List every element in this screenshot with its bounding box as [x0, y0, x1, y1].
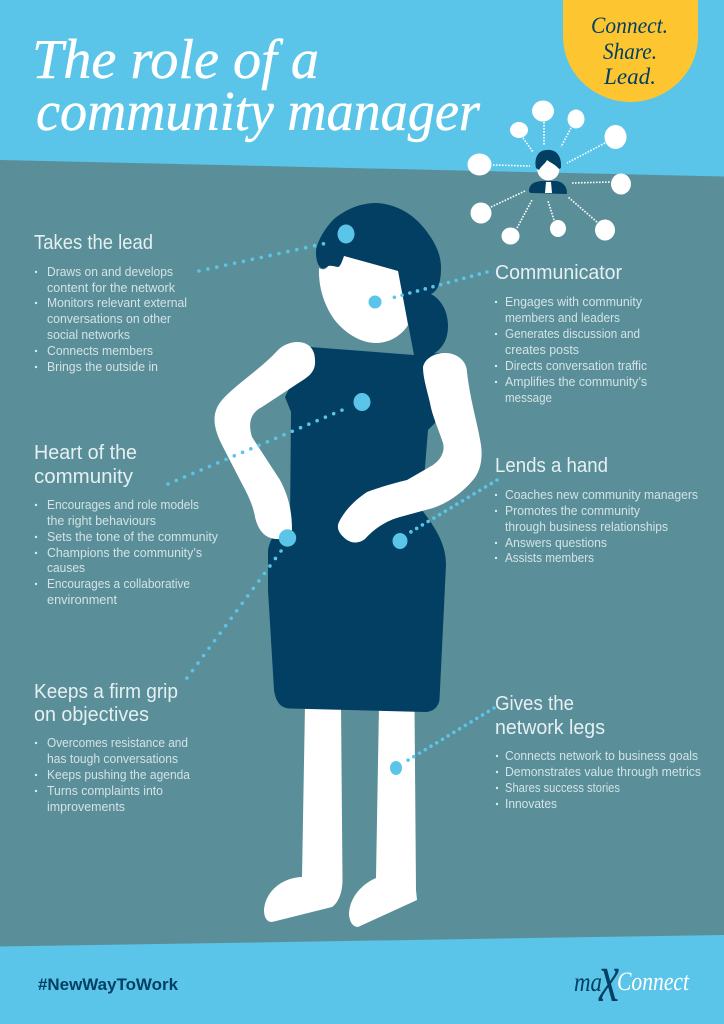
text block: Communicator: creates posts	[505, 343, 579, 357]
text block: Heart of the community: the right behaviours	[47, 514, 156, 528]
text block: Keeps a firm grip on objectives: Overcomes resistance and	[47, 736, 188, 750]
text block: Lends a hand	[495, 455, 698, 565]
text block: Communicator: Communicator	[495, 262, 622, 284]
main teal panel	[0, 160, 724, 946]
text block: Gives the network legs: Innovates	[505, 797, 557, 811]
text block: Gives the network legs: Demonstrates value through metrics	[505, 765, 701, 779]
text block: Keeps a firm grip on objectives: improvements	[47, 800, 125, 814]
text block: Keeps a firm grip on objectives: has tough conversations	[47, 752, 178, 766]
text block: Heart of the community: environment	[47, 593, 118, 607]
text block: Lends a hand: Lends a hand	[495, 455, 608, 477]
text block: Takes the lead: conversations on other	[47, 312, 171, 326]
text block: Communicator: members and leaders	[505, 311, 620, 325]
text block: Heart of the community: community	[34, 466, 133, 488]
text block: Gives the network legs: network legs	[495, 717, 605, 739]
text block: Lends a hand: Promotes the community	[505, 504, 641, 518]
badge: Connect. Share. Lead.	[563, 0, 698, 102]
badge: Connect. Share. Lead.: Share.	[603, 39, 657, 64]
text block: Lends a hand: Coaches new community managers	[505, 488, 698, 502]
text block: Communicator	[495, 262, 647, 405]
text block: Keeps a firm grip on objectives: Keeps pushing the agenda	[47, 768, 190, 782]
text block: Communicator: Generates discussion and	[505, 327, 640, 341]
badge: Connect. Share. Lead.: Connect.	[591, 13, 668, 38]
text block: Takes the lead	[34, 232, 187, 374]
text block: Communicator: Engages with community	[505, 295, 643, 309]
text block: Gives the network legs	[495, 693, 701, 811]
text block: Communicator: message	[505, 391, 552, 405]
logo: maxConnect	[574, 940, 690, 1017]
text block: Gives the network legs: Gives the	[495, 693, 574, 715]
text block: Lends a hand: Answers questions	[505, 536, 607, 550]
text block: Keeps a firm grip on objectives	[34, 681, 190, 814]
text block: Takes the lead: content for the network	[47, 281, 176, 295]
title: community manager	[36, 81, 480, 143]
badge: Connect. Share. Lead.: Lead.	[603, 64, 656, 89]
text block: Keeps a firm grip on objectives: on objectives	[34, 704, 149, 726]
hashtag: #NewWayToWork	[38, 975, 179, 994]
text block: Heart of the community: Encourages a collaborative	[47, 577, 190, 591]
text block: Keeps a firm grip on objectives: Keeps a firm grip	[34, 681, 178, 703]
text block: Communicator: Directs conversation traffic	[505, 359, 647, 373]
text block: Heart of the community: Champions the community’s	[47, 546, 202, 560]
icon: network of people around a manager	[468, 100, 631, 244]
text block: Heart of the community: Encourages and role models	[47, 498, 199, 512]
title: The role of a	[32, 29, 319, 91]
text block: Heart of the community: causes	[47, 561, 85, 575]
legs	[264, 705, 417, 927]
text block: Lends a hand: Assists members	[505, 551, 594, 565]
text block: Keeps a firm grip on objectives: Turns complaints into	[47, 784, 163, 798]
text block: Takes the lead: social networks	[47, 328, 130, 342]
text block: Takes the lead: Draws on and develops	[47, 265, 173, 279]
text block: Gives the network legs: Connects network to business goals	[505, 749, 698, 763]
dotted leader lines	[168, 243, 497, 762]
text block: Heart of the community: Heart of the	[34, 442, 137, 464]
dress	[268, 347, 446, 712]
text block: Communicator: Amplifies the community’s	[505, 375, 647, 389]
text block: Heart of the community	[34, 442, 219, 607]
hair	[316, 203, 448, 356]
face	[319, 256, 408, 343]
text block: Gives the network legs: Shares success stories	[505, 781, 620, 795]
illustration: woman	[168, 203, 497, 927]
logo: maxConnect: Connect	[617, 967, 690, 996]
text block: Lends a hand: through business relationships	[505, 520, 668, 534]
arms	[214, 342, 482, 542]
title	[32, 29, 480, 143]
logo: maxConnect: x	[598, 940, 619, 1017]
text block: Heart of the community: Sets the tone of the community	[47, 530, 219, 544]
text block: Takes the lead: Brings the outside in	[47, 360, 158, 374]
logo: maxConnect: ma	[574, 967, 602, 997]
marker dots	[279, 224, 408, 775]
text block: Takes the lead: Connects members	[47, 344, 153, 358]
text block: Takes the lead: Takes the lead	[34, 232, 153, 254]
text block: Takes the lead: Monitors relevant external	[47, 296, 187, 310]
